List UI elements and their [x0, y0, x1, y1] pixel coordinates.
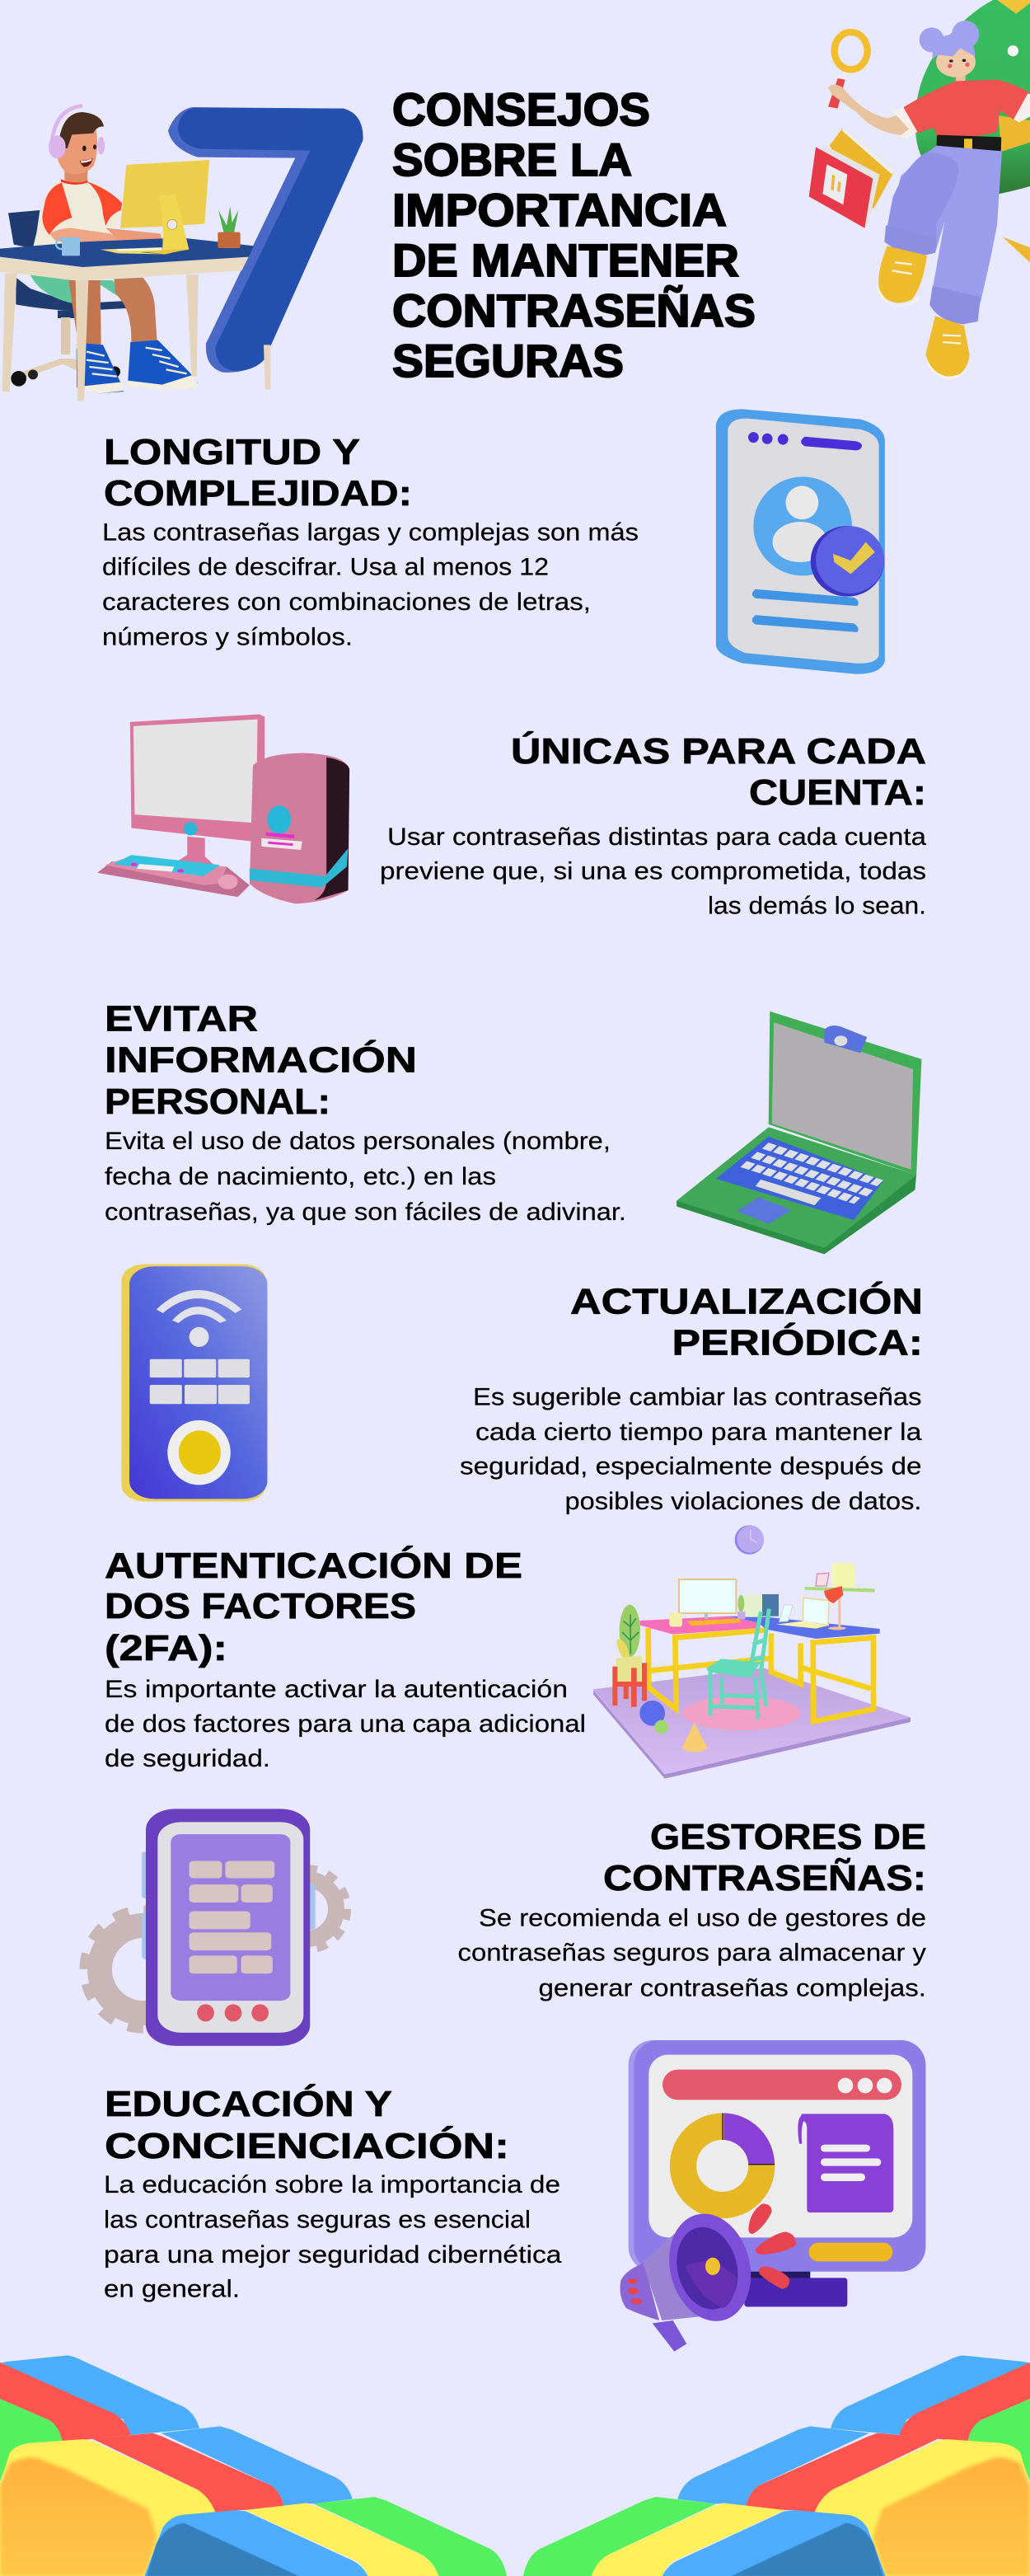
body text: números y símbolos.	[102, 623, 353, 651]
books	[809, 127, 895, 228]
panel: gestores de contraseñas	[85, 1809, 926, 2046]
heading: (2FA):	[105, 1628, 227, 1668]
body text: de dos factores para una capa adicional	[105, 1710, 586, 1738]
heading	[603, 1817, 926, 1898]
body text: La educación sobre la importancia de	[104, 2171, 560, 2198]
bottom decoration: colourful blocks, right	[523, 2355, 1030, 2576]
bottom decoration: colourful blocks, left	[0, 2355, 507, 2576]
green tree	[915, 0, 1030, 194]
icon: colourful office desk scene	[593, 1525, 911, 1779]
body text	[458, 1904, 926, 2001]
number 7	[168, 107, 363, 390]
heading: CONTRASEÑAS:	[603, 1857, 926, 1898]
body text	[380, 823, 927, 920]
body text: cada cierto tiempo para mantener la	[475, 1419, 922, 1446]
megaphone	[620, 2205, 762, 2352]
body text: Evita el uso de datos personales (nombre,	[105, 1128, 611, 1155]
heading: LONGITUD Y	[104, 432, 360, 472]
illustration: girl with magnifier and books	[809, 0, 1030, 380]
body text: Se recomienda el uso de gestores de	[479, 1904, 926, 1932]
right gear	[266, 1869, 347, 1950]
body text: contraseñas seguros para almacenar y	[458, 1939, 926, 1967]
panel: actualización periódica	[121, 1265, 923, 1515]
title: DE MANTENER	[392, 234, 739, 286]
heading: AUTENTICACIÓN DE	[105, 1545, 522, 1586]
title: IMPORTANCIA	[392, 184, 727, 236]
heading: DOS FACTORES	[105, 1586, 416, 1626]
title: CONTRASEÑAS	[392, 284, 756, 336]
panel: autenticación de dos factores	[105, 1525, 911, 1779]
icon: wifi remote	[121, 1265, 267, 1502]
body text	[102, 519, 639, 651]
body text: posibles violaciones de datos.	[565, 1488, 921, 1515]
heading: EDUCACIÓN Y	[105, 2083, 392, 2124]
heading	[511, 730, 926, 813]
body text	[104, 2171, 562, 2303]
star and decorations	[997, 0, 1030, 265]
panel: únicas para cada cuenta	[97, 715, 927, 920]
body text: de seguridad.	[105, 1745, 270, 1772]
chair	[8, 210, 127, 387]
boy	[30, 106, 199, 393]
panel: longitud y complejidad	[102, 409, 885, 674]
illustration: boy at desk with big number 7	[0, 106, 363, 401]
body text: fecha de nacimiento, etc.) en las	[105, 1163, 496, 1190]
title: SOBRE LA	[392, 134, 632, 185]
phone	[142, 1809, 316, 2046]
body text: para una mejor seguridad cibernética	[104, 2241, 562, 2269]
body text: las contraseñas seguras es esencial	[104, 2206, 531, 2234]
heading: PERIÓDICA:	[672, 1322, 923, 1363]
plant	[218, 206, 241, 248]
body text: caracteres con combinaciones de letras,	[102, 589, 591, 616]
body text: Usar contraseñas distintas para cada cuenta	[387, 823, 927, 851]
heading	[105, 2083, 509, 2166]
body text	[105, 1676, 586, 1772]
body text: Es sugerible cambiar las contraseñas	[473, 1383, 921, 1411]
icon: green laptop	[677, 1011, 921, 1255]
heading: INFORMACIÓN	[105, 1039, 417, 1080]
heading: CONCIENCIACIÓN:	[105, 2125, 509, 2166]
heading: GESTORES DE	[650, 1817, 926, 1857]
title: SEGURAS	[392, 335, 624, 387]
title	[392, 83, 756, 387]
body text: previene que, si una es comprometida, todas	[380, 857, 926, 885]
heading	[104, 432, 412, 514]
body text	[105, 1128, 626, 1226]
heading: COMPLEJIDAD:	[104, 473, 412, 514]
icon: phone with gears	[85, 1809, 347, 2046]
heading	[570, 1281, 923, 1363]
heading: ÚNICAS PARA CADA	[511, 730, 926, 772]
heading: EVITAR	[105, 999, 258, 1039]
body text: en general.	[104, 2275, 240, 2303]
panel: evitar información personal	[105, 999, 921, 1255]
mug and keyboard	[56, 237, 162, 256]
heading	[105, 1545, 522, 1668]
left gear	[85, 1911, 202, 2028]
body text: difíciles de descifrar. Usa al menos 12	[102, 554, 549, 580]
panel: educación y concienciación	[104, 2040, 925, 2352]
computer monitor	[120, 160, 209, 255]
heading	[105, 999, 417, 1122]
body text: las demás lo sean.	[708, 892, 926, 920]
desk	[0, 237, 254, 401]
body text: Las contraseñas largas y complejas son más	[102, 519, 639, 546]
body text: seguridad, especialmente después de	[460, 1452, 921, 1480]
heading: CUENTA:	[749, 772, 926, 813]
body text: contraseñas, ya que son fáciles de adivinar.	[105, 1199, 626, 1226]
icon: pink desktop computer	[97, 715, 349, 903]
heading: PERSONAL:	[105, 1082, 330, 1122]
icon: phone profile with check badge	[716, 409, 885, 674]
title: CONSEJOS	[392, 83, 650, 135]
heading: ACTUALIZACIÓN	[570, 1281, 923, 1322]
magnifying glass	[828, 32, 868, 109]
girl	[828, 21, 1030, 380]
body text: Es importante activar la autenticación	[105, 1676, 568, 1703]
body text: generar contraseñas complejas.	[539, 1975, 926, 2001]
body text	[460, 1383, 922, 1515]
icon: monitor dashboard with megaphone	[620, 2040, 925, 2352]
